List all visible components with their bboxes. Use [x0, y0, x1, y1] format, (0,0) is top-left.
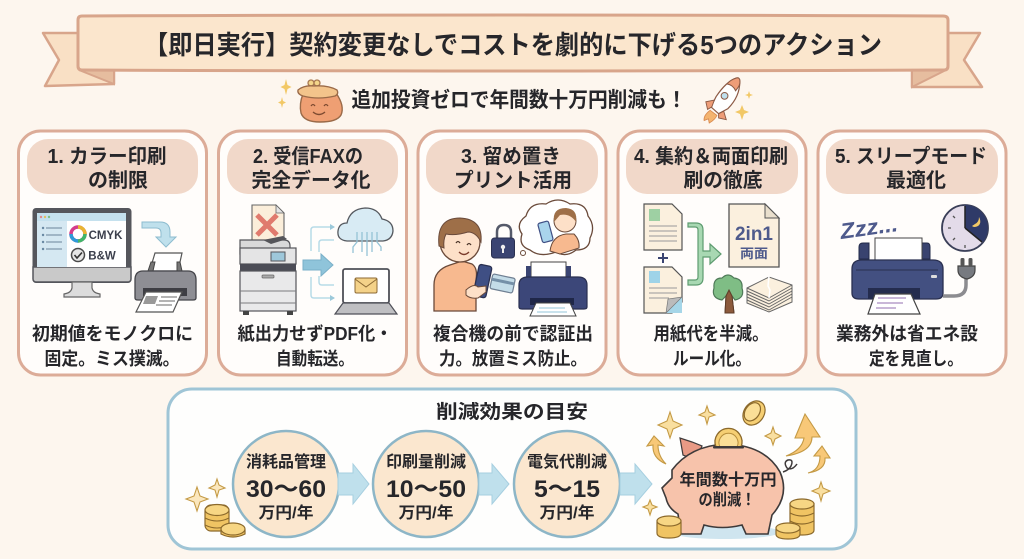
panel 5 header: 最適化	[886, 169, 946, 192]
panel 3 header: 3. 留め置き	[461, 145, 561, 168]
icon: multifunction printer	[240, 236, 296, 315]
panel 2 description	[238, 324, 392, 369]
circle: print volume savings: 10～50	[386, 476, 466, 503]
panel 1 description: 初期値をモノクロに	[32, 324, 193, 344]
panel 5 header	[826, 139, 998, 194]
icon: wallet	[278, 79, 342, 122]
icon: power plug	[943, 258, 975, 296]
panel 1 header: 1. カラー印刷	[48, 145, 166, 168]
panel 2 header	[227, 139, 398, 194]
panel 2 header: 2. 受信FAXの	[253, 145, 363, 168]
circle: consumables savings	[233, 431, 339, 537]
arrow: combine documents	[688, 223, 721, 285]
circle: print volume savings: 万円/年	[398, 503, 454, 522]
icon: 2in1 duplex document: 両面	[740, 246, 768, 261]
icon: Zzz text: Zzz...	[837, 211, 899, 244]
arrow	[338, 464, 369, 504]
circle: electricity savings: 万円/年	[540, 503, 594, 522]
icon: laptop with mail	[335, 269, 397, 314]
arrow	[479, 464, 509, 504]
panel 4 description: 用紙代を半減。	[654, 323, 768, 344]
icon: clock at night	[942, 205, 988, 251]
subtitle text: 追加投資ゼロで年間数十万円削減も！	[352, 88, 686, 112]
icon: thought bubble	[519, 200, 593, 256]
panel 4 header	[626, 139, 798, 194]
icon: cloud	[338, 208, 393, 256]
icon: tree	[713, 275, 743, 313]
icon: sparkles and up arrows	[643, 406, 830, 515]
panel 4 description	[654, 323, 768, 369]
circle: consumables savings: 30～60	[246, 476, 326, 503]
arrows: data transfer	[303, 224, 335, 301]
icon: monitor with CMYK and B&W settings: CMYK	[89, 230, 123, 242]
panel 5 description: 業務外は省エネ設	[836, 324, 978, 344]
icon: coins and sparkles left	[186, 479, 245, 537]
circle: electricity savings: 電気代削減	[527, 452, 607, 471]
panel: action 1 color print limit	[18, 131, 206, 375]
panel 2 header: 完全データ化	[252, 168, 370, 192]
icon: rocket	[704, 78, 753, 123]
panel 3 description: 複合機の前で認証出	[433, 324, 593, 344]
circle: print volume savings: 印刷量削減	[386, 452, 466, 471]
panel 1 header: の制限	[88, 169, 148, 192]
panel 2 description: 自動転送。	[276, 349, 354, 369]
panel: action 5 sleep mode	[818, 131, 1006, 375]
icon: piggy bank	[662, 428, 797, 539]
title banner	[43, 15, 982, 87]
icon: padlock	[492, 225, 514, 258]
icon: 2in1 duplex document	[729, 204, 779, 267]
icon: crossed-out paper	[252, 205, 284, 240]
circle: print volume savings	[373, 431, 479, 537]
icon: printer with output	[135, 253, 196, 312]
savings heading: 削減効果の目安	[436, 400, 588, 423]
panel 4 description: ルール化。	[673, 349, 751, 369]
circle: consumables savings: 万円/年	[258, 503, 314, 522]
circle: electricity savings	[514, 431, 620, 537]
arrow: settings to printer	[142, 222, 176, 247]
icon: person with phone	[434, 218, 492, 311]
title text: 【即日実行】契約変更なしでコストを劇的に下げる5つのアクション	[144, 30, 882, 60]
panel 1 description: 固定。ミス撲滅。	[44, 348, 180, 369]
icon: source documents	[644, 204, 682, 313]
subtitle with wallet and rocket	[278, 78, 753, 123]
panel 4 header: 4. 集約＆両面印刷	[634, 145, 788, 168]
panel 1 description	[32, 324, 193, 369]
panel 5 description	[836, 324, 978, 369]
icon: sleeping printer	[852, 238, 943, 314]
icon: coins around pig	[657, 397, 814, 539]
arrow	[620, 464, 652, 504]
icon: paper stack	[747, 276, 792, 312]
panel 1 header	[27, 139, 198, 194]
panel 5 header: 5. スリープモード	[835, 145, 987, 168]
icon: piggy bank: 年間数十万円	[680, 470, 776, 489]
panel 5 description: 定を見直し。	[869, 349, 963, 369]
panel: action 4 n-up and duplex	[618, 131, 806, 375]
panel 3 description	[433, 324, 593, 369]
icon: 2in1 duplex document: 2in1	[735, 224, 773, 245]
circle: consumables savings: 消耗品管理	[246, 452, 326, 471]
icon: IC card	[490, 274, 515, 293]
icon: monitor with CMYK and B&W settings	[33, 208, 131, 297]
panel: savings estimate	[168, 389, 856, 549]
panel 2 description: 紙出力せずPDF化・	[238, 324, 392, 344]
panel 3 description: 力。放置ミス防止。	[439, 349, 587, 369]
panel: action 2 FAX digitization	[218, 131, 406, 375]
icon: navy printer	[519, 262, 587, 316]
panel: action 3 held print	[418, 131, 606, 375]
circle: electricity savings: 5～15	[534, 476, 600, 503]
panel 3 header	[426, 139, 598, 194]
panel 4 header: 刷の徹底	[684, 169, 762, 192]
icon: monitor with CMYK and B&W settings: B&W	[88, 250, 116, 262]
panel 3 header: プリント活用	[454, 169, 572, 192]
icon: piggy bank: の削減！	[698, 491, 756, 509]
